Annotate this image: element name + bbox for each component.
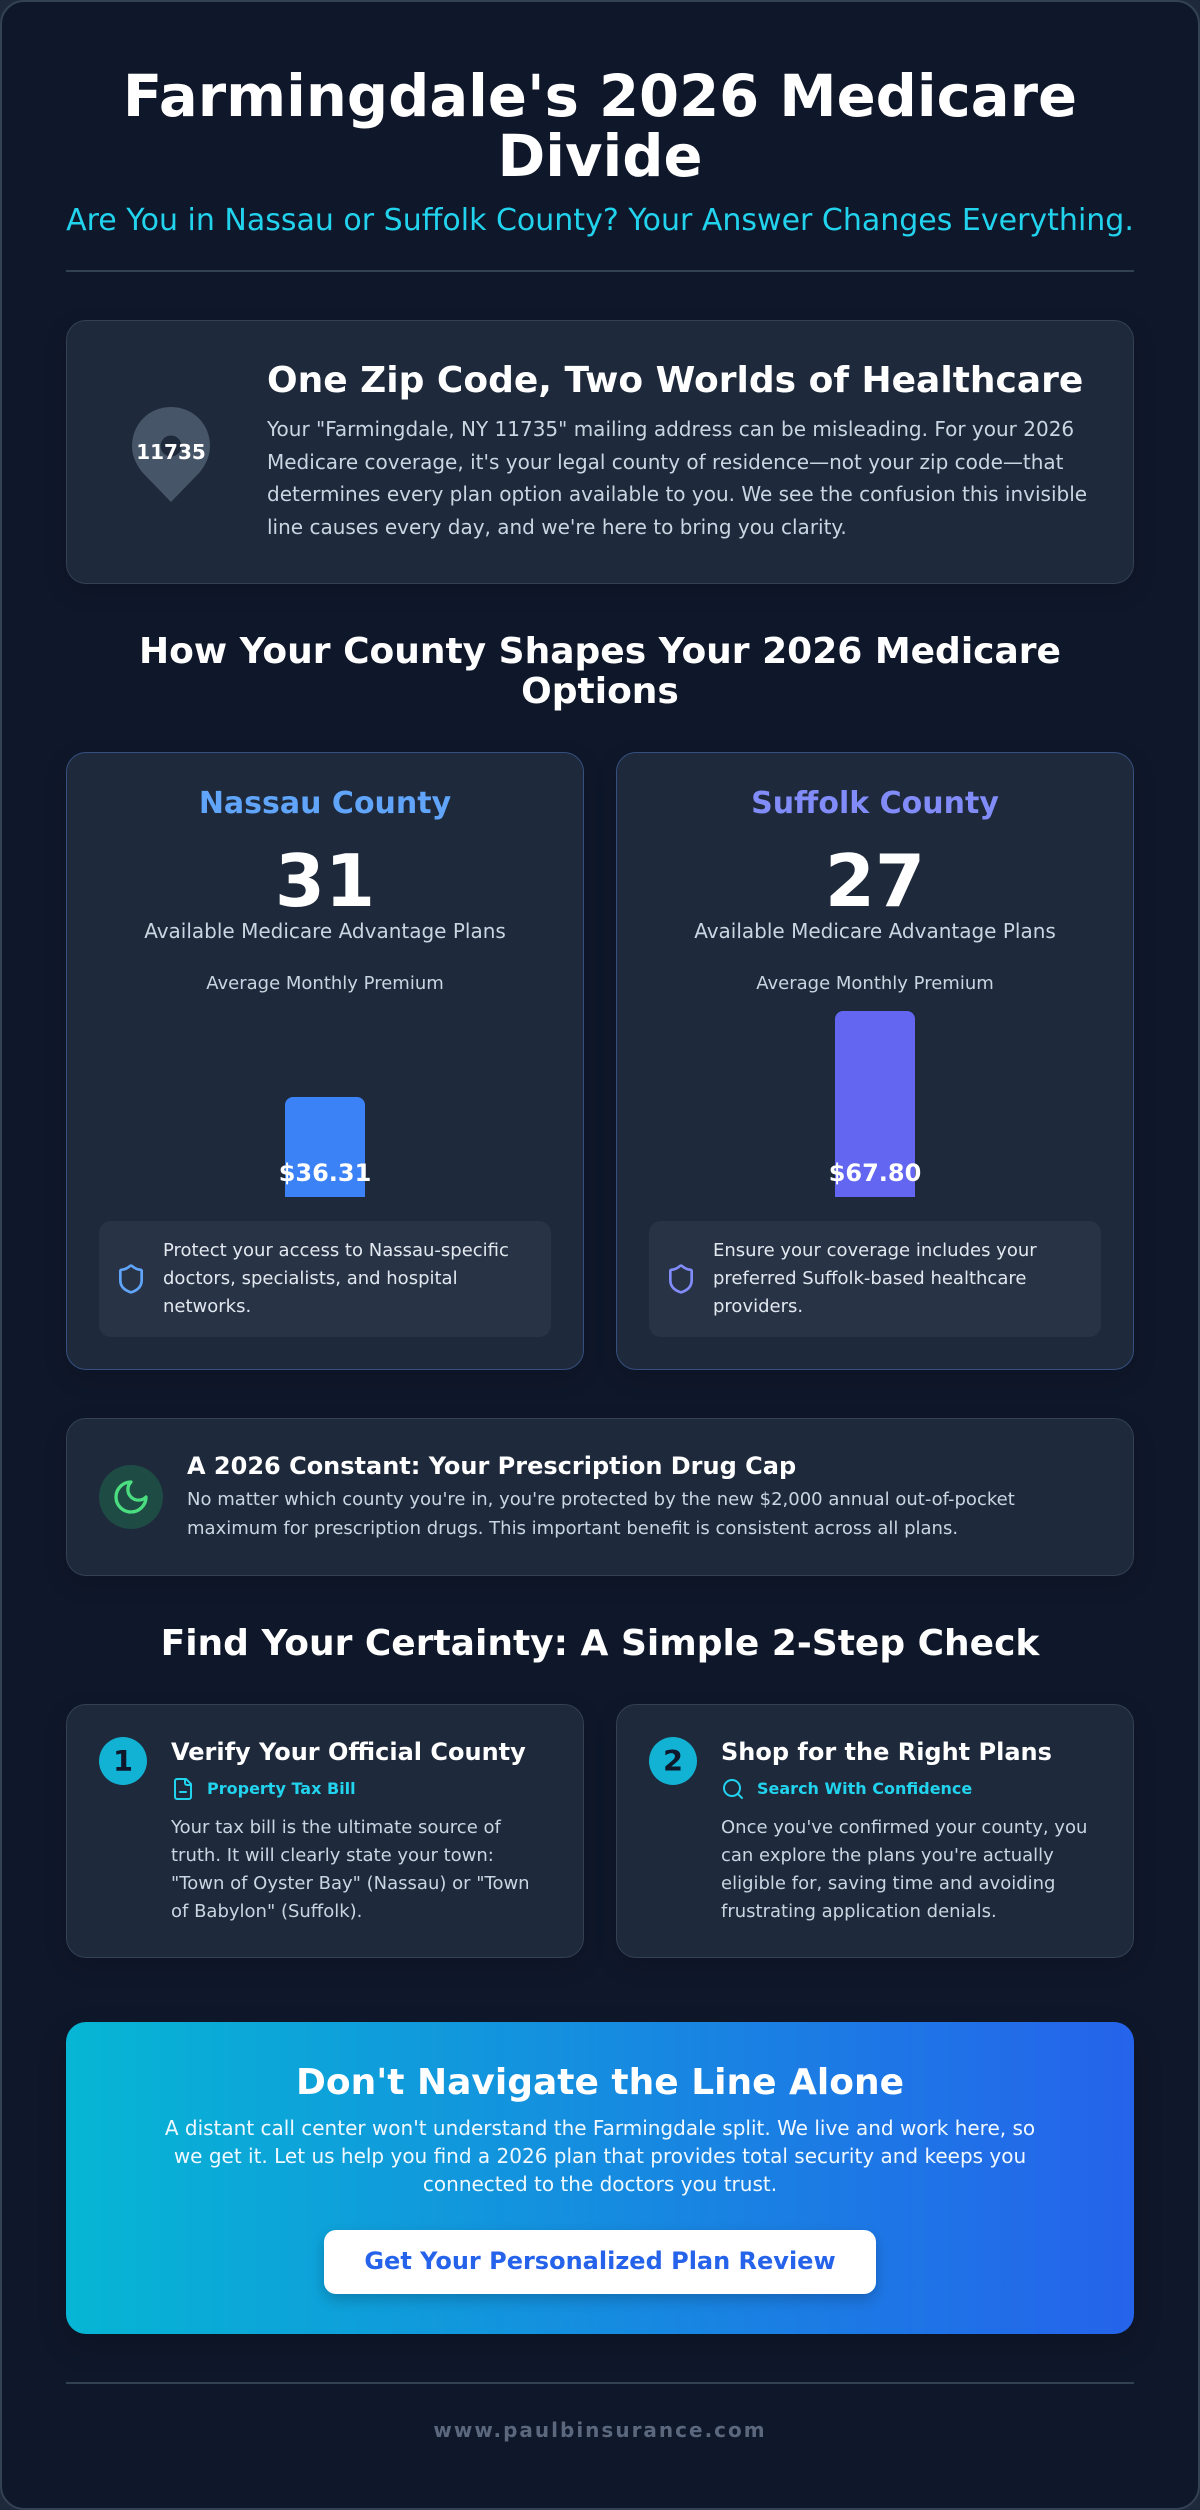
callout [649, 1221, 1101, 1337]
bar chart: Nassau premium [285, 1097, 365, 1197]
panel: Suffolk County [616, 752, 1134, 1370]
bar value: $67.80 [829, 1159, 921, 1187]
title [123, 63, 1077, 190]
step body: can explore the plans you're actually [721, 1845, 1054, 1866]
icon: moon [99, 1465, 163, 1529]
panel heading: One Zip Code, Two Worlds of Healthcare [267, 360, 1083, 401]
drug cap heading: A 2026 Constant: Your Prescription Drug Cap [187, 1452, 796, 1480]
plan count label: Available Medicare Advantage Plans [694, 919, 1056, 943]
drug cap body: No matter which county you're in, you're protected by the new $2,000 annual out-of-pocket [187, 1489, 1015, 1510]
cta body: connected to the doctors you trust. [423, 2172, 777, 2196]
bar chart: Suffolk premium [835, 1011, 915, 1197]
cta body: A distant call center won't understand the Farmingdale split. We live and work here, so [165, 2116, 1035, 2140]
icon: shield [669, 1264, 693, 1294]
callout text: Ensure your coverage includes your [713, 1240, 1037, 1261]
step number [99, 1737, 147, 1785]
step body: "Town of Oyster Bay" (Nassau) or "Town [171, 1873, 530, 1894]
drug cap body: maximum for prescription drugs. This important benefit is consistent across all plans. [187, 1518, 958, 1539]
drug cap body [187, 1489, 1015, 1539]
panel: step 1 [66, 1704, 584, 1958]
plan count label: Available Medicare Advantage Plans [144, 919, 506, 943]
callout [99, 1221, 551, 1337]
section heading: county options: How Your County Shapes Your 2026 Medicare [139, 631, 1061, 672]
panel body text: Medicare coverage, it's your legal county of residence—not your zip code—that [267, 450, 1064, 474]
callout text: preferred Suffolk-based healthcare [713, 1268, 1026, 1289]
panel body text [267, 417, 1087, 538]
callout text: doctors, specialists, and hospital [163, 1268, 458, 1289]
bar value: $36.31 [279, 1159, 371, 1187]
premium label: Average Monthly Premium [756, 973, 994, 994]
callout text: providers. [713, 1296, 803, 1317]
step tag: Property Tax Bill [207, 1779, 356, 1798]
icon: map pin with zip code [132, 407, 210, 502]
icon: document [174, 1778, 192, 1800]
panel: step 2 [616, 1704, 1134, 1958]
footer url: www.paulbinsurance.com [433, 2418, 767, 2442]
step body: Once you've confirmed your county, you [721, 1817, 1087, 1838]
callout text: networks. [163, 1296, 251, 1317]
cta button [324, 2230, 876, 2294]
panel: Nassau County [66, 752, 584, 1370]
section heading: county options [139, 631, 1061, 712]
step tag: Search With Confidence [757, 1779, 972, 1798]
section heading: two-step check: Find Your Certainty: A Simple 2-Step Check [161, 1623, 1039, 1664]
panel: prescription drug cap [66, 1418, 1134, 1576]
callout text [163, 1240, 509, 1317]
panel body text: Your "Farmingdale, NY 11735" mailing address can be misleading. For your 2026 [267, 417, 1074, 441]
section heading: county options: Options [521, 671, 679, 712]
panel: one zip code intro [66, 320, 1134, 584]
step number: 2 [663, 1744, 683, 1778]
icon: search [723, 1779, 743, 1799]
step body: truth. It will clearly state your town: [171, 1845, 494, 1866]
step body: of Babylon" (Suffolk). [171, 1901, 362, 1922]
step number: 1 [113, 1744, 133, 1778]
step body: frustrating application denials. [721, 1901, 997, 1922]
plan count: 31 [275, 839, 375, 923]
cta button: Get Your Personalized Plan Review [364, 2247, 836, 2275]
plan count: 27 [825, 839, 925, 923]
step body: eligible for, saving time and avoiding [721, 1873, 1055, 1894]
title: Farmingdale's 2026 Medicare [123, 63, 1077, 130]
step number [649, 1737, 697, 1785]
panel body text: line causes every day, and we're here to bring you clarity. [267, 514, 847, 538]
step heading: Shop for the Right Plans [721, 1738, 1052, 1766]
icon: shield [119, 1264, 143, 1294]
premium label: Average Monthly Premium [206, 973, 444, 994]
step body: Your tax bill is the ultimate source of [171, 1817, 501, 1838]
panel body text: determines every plan option available to you. We see the confusion this invisible [267, 482, 1087, 506]
icon: map pin with zip code: 11735 [136, 440, 206, 464]
step heading: Verify Your Official County [171, 1738, 526, 1766]
cta body: we get it. Let us help you find a 2026 plan that provides total security and keeps you [174, 2144, 1026, 2168]
step body [171, 1817, 530, 1922]
county name: Nassau County [199, 786, 451, 821]
subtitle: Are You in Nassau or Suffolk County? Your Answer Changes Everything. [66, 203, 1134, 238]
step body [721, 1817, 1087, 1922]
callout text: Protect your access to Nassau-specific [163, 1240, 509, 1261]
title: Divide [497, 123, 703, 190]
cta body [165, 2116, 1035, 2196]
callout text [713, 1240, 1037, 1317]
panel: call to action [66, 2022, 1134, 2334]
county name: Suffolk County [751, 786, 999, 821]
cta heading: Don't Navigate the Line Alone [296, 2062, 904, 2103]
